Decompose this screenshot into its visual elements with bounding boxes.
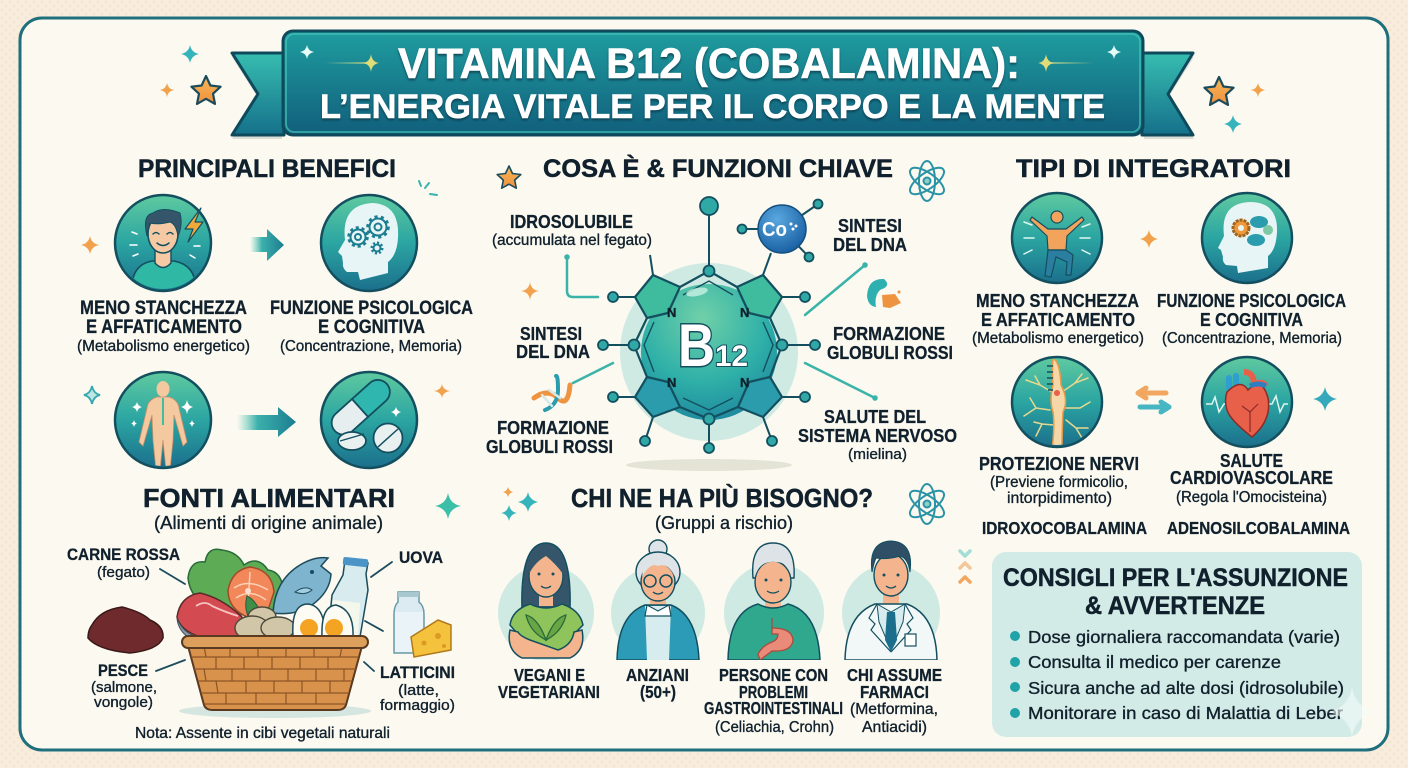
icon: atom xyxy=(906,161,948,201)
icon: pills xyxy=(321,372,417,468)
text block: heart xyxy=(1170,450,1333,506)
icon: head with gears xyxy=(321,195,417,291)
label: carne rossa: (fegato) xyxy=(97,564,150,581)
label: latticini: formaggio) xyxy=(380,697,455,714)
icon: nerves and spine xyxy=(1012,357,1102,450)
basket body xyxy=(188,646,362,710)
cobalt atom: Co xyxy=(762,219,787,241)
icon: energetic man xyxy=(115,195,211,291)
icon: teal cell and orange blob xyxy=(867,279,901,308)
text block: energy benefit: (Metabolismo energetico) xyxy=(77,338,250,355)
arrows: exchange xyxy=(1138,388,1169,412)
text block: cognitive benefit: FUNZIONE PSICOLOGICA xyxy=(270,298,473,319)
label: carne rossa: CARNE ROSSA xyxy=(67,545,180,564)
person: man with stomach xyxy=(724,543,824,663)
labels: formazione globuli rossi left xyxy=(486,418,613,457)
icon: sparkle xyxy=(1140,230,1158,248)
heading xyxy=(1003,564,1348,620)
decorative burst xyxy=(419,181,437,195)
bullet list: Monitorare in caso di Malattia di Leber xyxy=(1028,703,1343,723)
label: farmaci: CHI ASSUME xyxy=(847,665,942,685)
nitrogen labels: N xyxy=(667,305,676,320)
icon: cheese xyxy=(411,620,451,657)
icon: heart xyxy=(1202,357,1292,447)
icon: human body xyxy=(115,372,211,470)
food callout lines xyxy=(156,562,392,671)
panel: principali benefici xyxy=(77,155,473,470)
icon: sparkles xyxy=(501,487,538,521)
labels: sistema nervoso: SALUTE DEL xyxy=(824,407,926,427)
label: gastrointestinali: (Celiachia, Crohn) xyxy=(715,719,834,736)
text block: heart: (Regola l'Omocisteina) xyxy=(1176,489,1327,506)
eggs xyxy=(293,604,353,636)
label: farmaci: Antiacidi) xyxy=(862,719,927,736)
panel: consigli e avvertenze xyxy=(992,552,1376,737)
B12 label xyxy=(678,312,748,379)
label: anziani: ANZIANI xyxy=(626,665,689,685)
text block: cognition: FUNZIONE PSICOLOGICA xyxy=(1157,290,1346,311)
icon: head with brain xyxy=(1202,193,1292,283)
text block: energy benefit: MENO STANCHEZZA xyxy=(80,298,247,319)
nitrogen labels: N xyxy=(740,375,749,390)
icon: sparkle xyxy=(521,282,539,300)
text: adenosilcobalamina: ADENOSILCOBALAMINA xyxy=(1167,518,1350,538)
title text xyxy=(320,40,1105,126)
person: vegan woman xyxy=(498,543,594,661)
heading: COSA È & FUNZIONI CHIAVE xyxy=(543,154,893,183)
icon: chevrons xyxy=(960,551,970,582)
labels: idrosolubile: IDROSOLUBILE xyxy=(510,212,633,232)
label: farmaci: (Metformina, xyxy=(850,701,938,718)
icon: DNA helix xyxy=(534,376,570,410)
text block: energy: E AFFATICAMENTO xyxy=(981,309,1135,330)
label: farmaci: FARMACI xyxy=(860,682,929,702)
meat xyxy=(177,593,242,637)
text block: nerves: PROTEZIONE NERVI xyxy=(979,453,1139,474)
icon: active person xyxy=(1012,193,1102,283)
label: latticini: (latte, xyxy=(398,682,439,699)
text block: energy benefit xyxy=(77,298,250,355)
text: idroxocobalamina: IDROXOCOBALAMINA xyxy=(982,518,1147,538)
icon: atom xyxy=(906,484,948,524)
label: gastrointestinali: PERSONE CON xyxy=(719,665,828,685)
text block: nerves xyxy=(979,453,1139,507)
decorative top-left stars xyxy=(160,45,221,104)
label: farmaci xyxy=(847,665,942,736)
label: pesce: (salmone, xyxy=(91,679,157,696)
label: anziani xyxy=(626,665,689,702)
icon: star xyxy=(497,166,521,188)
label: gastrointestinali xyxy=(704,665,843,736)
title text: VITAMINA B12 (COBALAMINA): xyxy=(398,40,1020,88)
labels: sintesi del dna left: DEL DNA xyxy=(516,342,590,362)
heading: CONSIGLI PER L'ASSUNZIONE xyxy=(1003,564,1348,592)
icon: liver xyxy=(88,607,163,653)
text block: nerves: intorpidimento) xyxy=(1007,490,1112,507)
text block: cognitive benefit xyxy=(270,298,473,355)
label: vegani: VEGETARIANI xyxy=(498,682,600,702)
label: uova: UOVA xyxy=(399,548,443,567)
bullet list: Consulta il medico per carenze xyxy=(1028,652,1281,672)
bullet list: Sicura anche ad alte dosi (idrosolubile) xyxy=(1028,678,1344,698)
text block: energy: (Metabolismo energetico) xyxy=(972,330,1144,347)
label: vegani xyxy=(498,665,600,702)
pyrrole rings xyxy=(635,275,782,417)
labels: formazione globuli rossi right: FORMAZIONE xyxy=(833,324,945,344)
label: gastrointestinali: GASTROINTESTINALI xyxy=(704,698,843,718)
label: latticini xyxy=(380,663,455,714)
icon: sparkle xyxy=(81,236,99,254)
labels: formazione globuli rossi right: GLOBULI ROSSI xyxy=(827,343,953,363)
labels: formazione globuli rossi left: FORMAZIONE xyxy=(497,418,609,438)
text block: energy benefit: E AFFATICAMENTO xyxy=(86,317,242,338)
label: carne rossa xyxy=(67,545,180,581)
text block: cognition: (Concentrazione, Memoria) xyxy=(1162,330,1342,347)
faint sparkle xyxy=(1328,688,1376,736)
labels: idrosolubile: (accumulata nel fegato) xyxy=(492,232,652,249)
labels: sistema nervoso xyxy=(798,407,957,463)
text block: energy xyxy=(972,290,1144,347)
icon: milk jar xyxy=(394,592,424,653)
label: anziani: (50+) xyxy=(640,682,676,702)
B12 label: B xyxy=(678,312,715,379)
labels: sintesi del dna right: DEL DNA xyxy=(833,235,907,255)
text block: cognition: E COGNITIVA xyxy=(1200,309,1303,330)
bottle xyxy=(328,560,368,637)
molecule diagram xyxy=(598,197,822,471)
labels: sistema nervoso: SISTEMA NERVOSO xyxy=(798,426,957,446)
cobalt atom xyxy=(758,205,806,253)
label: gastrointestinali: PROBLEMI xyxy=(739,682,808,702)
text block: cognitive benefit: (Concentrazione, Memoria) xyxy=(280,338,462,355)
icon: sparkle xyxy=(435,493,461,519)
icon: sparkle xyxy=(1313,387,1337,411)
salmon xyxy=(228,567,274,618)
B12 label: 12 xyxy=(715,340,748,373)
fish xyxy=(273,558,331,614)
heading: & AVVERTENZE xyxy=(1085,592,1265,620)
nitrogen labels: N xyxy=(667,375,676,390)
label: pesce: PESCE xyxy=(98,661,148,680)
text block: heart: CARDIOVASCOLARE xyxy=(1170,467,1333,488)
clams xyxy=(235,607,295,640)
arrow xyxy=(237,407,296,437)
label: latticini: LATTICINI xyxy=(380,663,455,682)
nitrogen labels: N xyxy=(740,305,749,320)
panel: cosa e funzioni chiave xyxy=(486,154,957,471)
basket rim xyxy=(182,636,368,648)
decorative top-right stars xyxy=(1204,77,1265,133)
labels: sintesi del dna left: SINTESI xyxy=(520,324,582,344)
labels: sintesi del dna right xyxy=(833,216,907,255)
panel: fonti alimentari xyxy=(67,483,461,742)
text block: cognition xyxy=(1157,290,1346,347)
labels: sistema nervoso: (mielina) xyxy=(848,446,907,463)
atoms xyxy=(598,197,822,453)
person: elderly woman xyxy=(611,540,705,660)
title banner xyxy=(232,31,1194,139)
callout lines xyxy=(566,256,876,400)
panel: tipi di integratori xyxy=(972,155,1350,538)
arrow xyxy=(250,229,284,261)
labels: sintesi del dna right: SINTESI xyxy=(838,216,902,236)
label: vegani: VEGANI E xyxy=(514,665,585,685)
bullet list: Dose giornaliera raccomandata (varie) xyxy=(1028,627,1340,647)
label: pesce xyxy=(91,661,157,711)
labels: formazione globuli rossi right xyxy=(827,324,953,363)
label: pesce: vongole) xyxy=(94,694,153,711)
heading: TIPI DI INTEGRATORI xyxy=(1016,155,1291,183)
icon: sparkle xyxy=(434,384,450,398)
panel: chi ne ha piu bisogno xyxy=(498,483,948,736)
subheading: (Alimenti di origine animale) xyxy=(154,512,383,533)
labels: formazione globuli rossi left: GLOBULI ROSSI xyxy=(486,437,613,457)
labels: sintesi del dna left xyxy=(516,324,590,362)
nitrogen labels xyxy=(667,305,749,390)
bonds xyxy=(603,204,818,448)
lettuce xyxy=(188,549,283,620)
title text: L’ENERGIA VITALE PER IL CORPO E LA MENTE xyxy=(320,88,1105,126)
subheading: (Gruppi a rischio) xyxy=(655,512,793,533)
labels: idrosolubile xyxy=(492,212,652,249)
heading: CHI NE HA PIÙ BISOGNO? xyxy=(571,483,873,513)
text block: cognitive benefit: E COGNITIVA xyxy=(318,317,425,338)
text block: energy: MENO STANCHEZZA xyxy=(976,290,1139,311)
basket of food xyxy=(177,549,371,718)
text block: heart: SALUTE xyxy=(1220,450,1283,471)
heading: FONTI ALIMENTARI xyxy=(143,483,395,513)
bullet list xyxy=(1010,627,1344,723)
icon: sparkle outline xyxy=(84,386,100,404)
person: doctor xyxy=(842,541,940,662)
note: Nota: Assente in cibi vegetali naturali xyxy=(135,725,390,742)
text block: nerves: (Previene formicolio, xyxy=(990,474,1128,491)
heading: PRINCIPALI BENEFICI xyxy=(138,155,396,183)
